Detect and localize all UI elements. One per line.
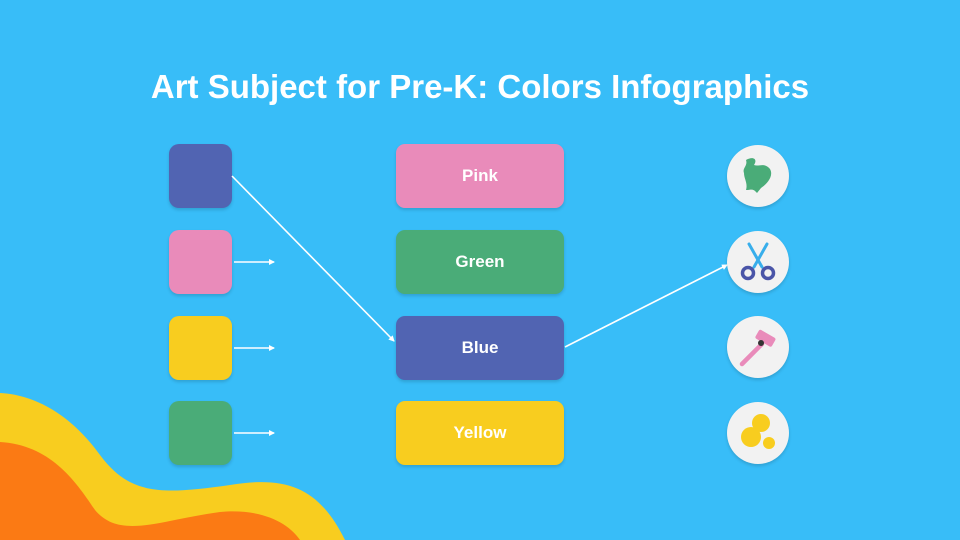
- title: Art Subject for Pre-K: Colors Infographics: [151, 68, 809, 105]
- icon: hammer: [727, 316, 789, 378]
- color labels: [395, 144, 565, 468]
- color squares: [168, 144, 233, 468]
- icon: buttons: [727, 402, 789, 464]
- icon: scissors: [727, 231, 789, 293]
- color labels: Green: [455, 252, 505, 271]
- color labels: Yellow: [454, 423, 506, 442]
- color labels: Blue: [462, 338, 498, 357]
- icon: clay: [727, 145, 789, 207]
- color labels: Pink: [462, 166, 498, 185]
